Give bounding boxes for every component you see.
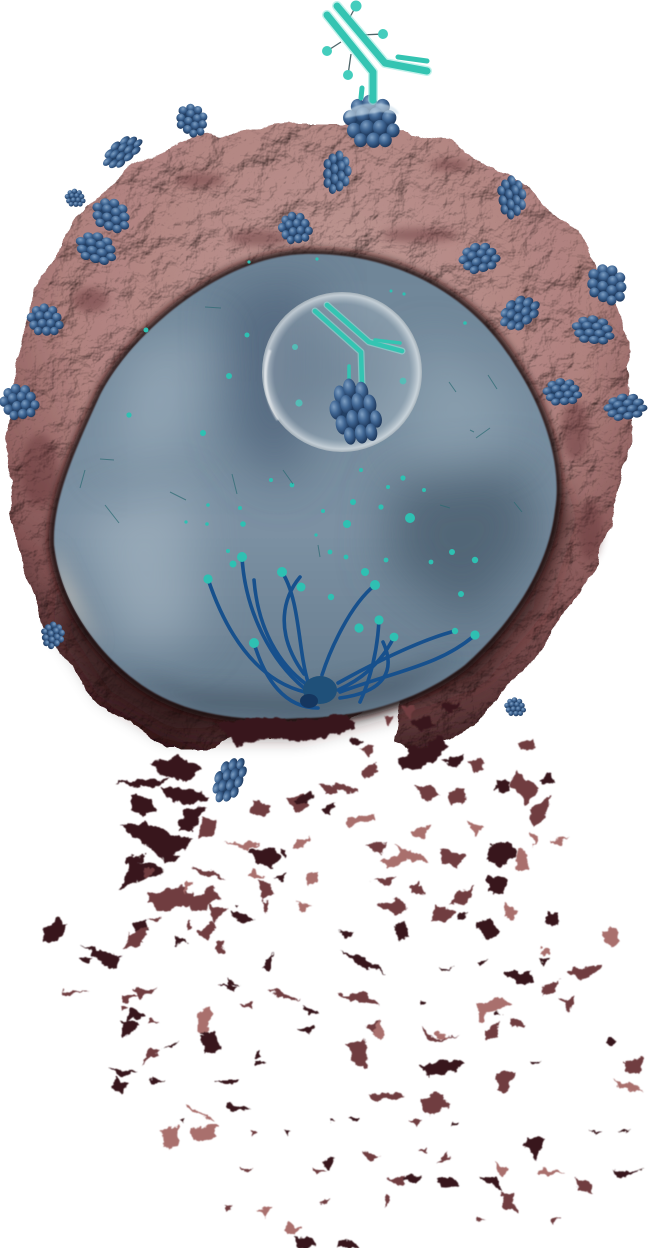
surface receptor clusters	[0, 97, 649, 808]
antibody-bound receptor at surface	[343, 95, 400, 148]
interior light and shadow masses	[50, 280, 545, 718]
rim shadow	[60, 470, 570, 735]
microtubule aster	[203, 552, 480, 708]
antibody	[322, 0, 427, 100]
small receptor fragments in interior	[80, 307, 522, 557]
membrane debris	[42, 702, 644, 1248]
internalised receptor	[325, 374, 386, 448]
cell interior cutaway	[49, 249, 562, 724]
crater shadows on the membrane	[22, 159, 602, 560]
cell membrane shell	[6, 124, 632, 754]
vesicle	[262, 292, 422, 452]
centrosome hub	[303, 676, 337, 704]
free teal particles	[126, 257, 478, 633]
microtubule tips	[203, 552, 480, 648]
internalised antibody	[315, 305, 402, 385]
